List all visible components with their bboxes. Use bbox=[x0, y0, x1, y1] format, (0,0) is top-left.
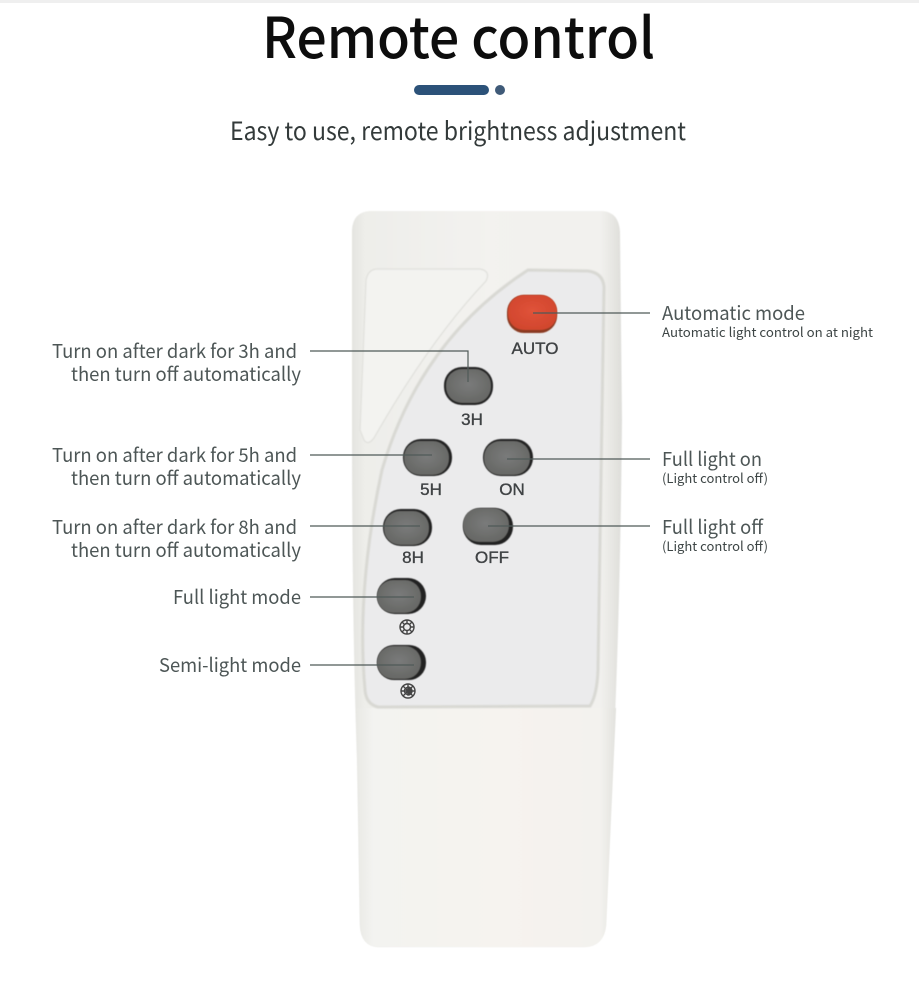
button: 3H: 3H bbox=[461, 410, 483, 429]
button panel bbox=[363, 270, 604, 707]
remote control device bbox=[352, 211, 622, 947]
button: OFF: OFF bbox=[475, 548, 509, 567]
callout: 3h: Turn on after dark for 3h and bbox=[52, 337, 297, 364]
button: AUTO bbox=[507, 295, 558, 358]
callout: semi-light mode: Semi-light mode bbox=[159, 651, 301, 678]
button: 5H: 5H bbox=[420, 480, 442, 499]
button: 5H bbox=[403, 439, 452, 499]
button: ON bbox=[483, 439, 533, 499]
button: 8H: 8H bbox=[402, 548, 424, 567]
button: AUTO: AUTO bbox=[512, 339, 558, 358]
icon: semi-light symbol bbox=[401, 684, 415, 698]
callout: full light off: Full light off bbox=[662, 513, 764, 540]
callout: 8h: Turn on after dark for 8h and bbox=[52, 513, 297, 540]
icon: full light symbol bbox=[400, 620, 414, 634]
callout: 3h: then turn off automatically bbox=[71, 360, 301, 387]
button: OFF bbox=[463, 508, 513, 567]
subtitle: Easy to use, remote brightness adjustment bbox=[230, 112, 687, 148]
callout: full light on: (Light control off) bbox=[662, 468, 768, 487]
callout: full light off: (Light control off) bbox=[662, 536, 768, 555]
callout: 8h bbox=[52, 513, 420, 563]
button: 8H bbox=[383, 509, 432, 567]
button: ON: ON bbox=[499, 480, 525, 499]
callout: automatic mode bbox=[533, 299, 873, 341]
left window recess bbox=[360, 269, 488, 443]
callout: 5h bbox=[52, 441, 432, 491]
button: full light bbox=[377, 578, 426, 614]
callout: 8h: then turn off automatically bbox=[71, 536, 301, 563]
callout: 5h: Turn on after dark for 5h and bbox=[52, 441, 297, 468]
callout: 5h: then turn off automatically bbox=[71, 464, 301, 491]
callout: full light on: Full light on bbox=[662, 445, 762, 472]
callout: full light mode: Full light mode bbox=[173, 583, 301, 610]
button: 3H bbox=[444, 367, 493, 429]
button: semi-light bbox=[377, 645, 426, 680]
remote body bbox=[352, 211, 622, 947]
top edge shadow bbox=[0, 0, 919, 3]
callout: automatic mode: Automatic light control on at night bbox=[662, 322, 873, 341]
callout: automatic mode: Automatic mode bbox=[662, 299, 805, 326]
lower body tint bbox=[357, 708, 616, 947]
accent divider: bar and dot bbox=[414, 85, 505, 95]
callout: full light off bbox=[488, 513, 768, 555]
callout: full light on bbox=[507, 445, 768, 487]
callout: 3h bbox=[52, 337, 468, 387]
